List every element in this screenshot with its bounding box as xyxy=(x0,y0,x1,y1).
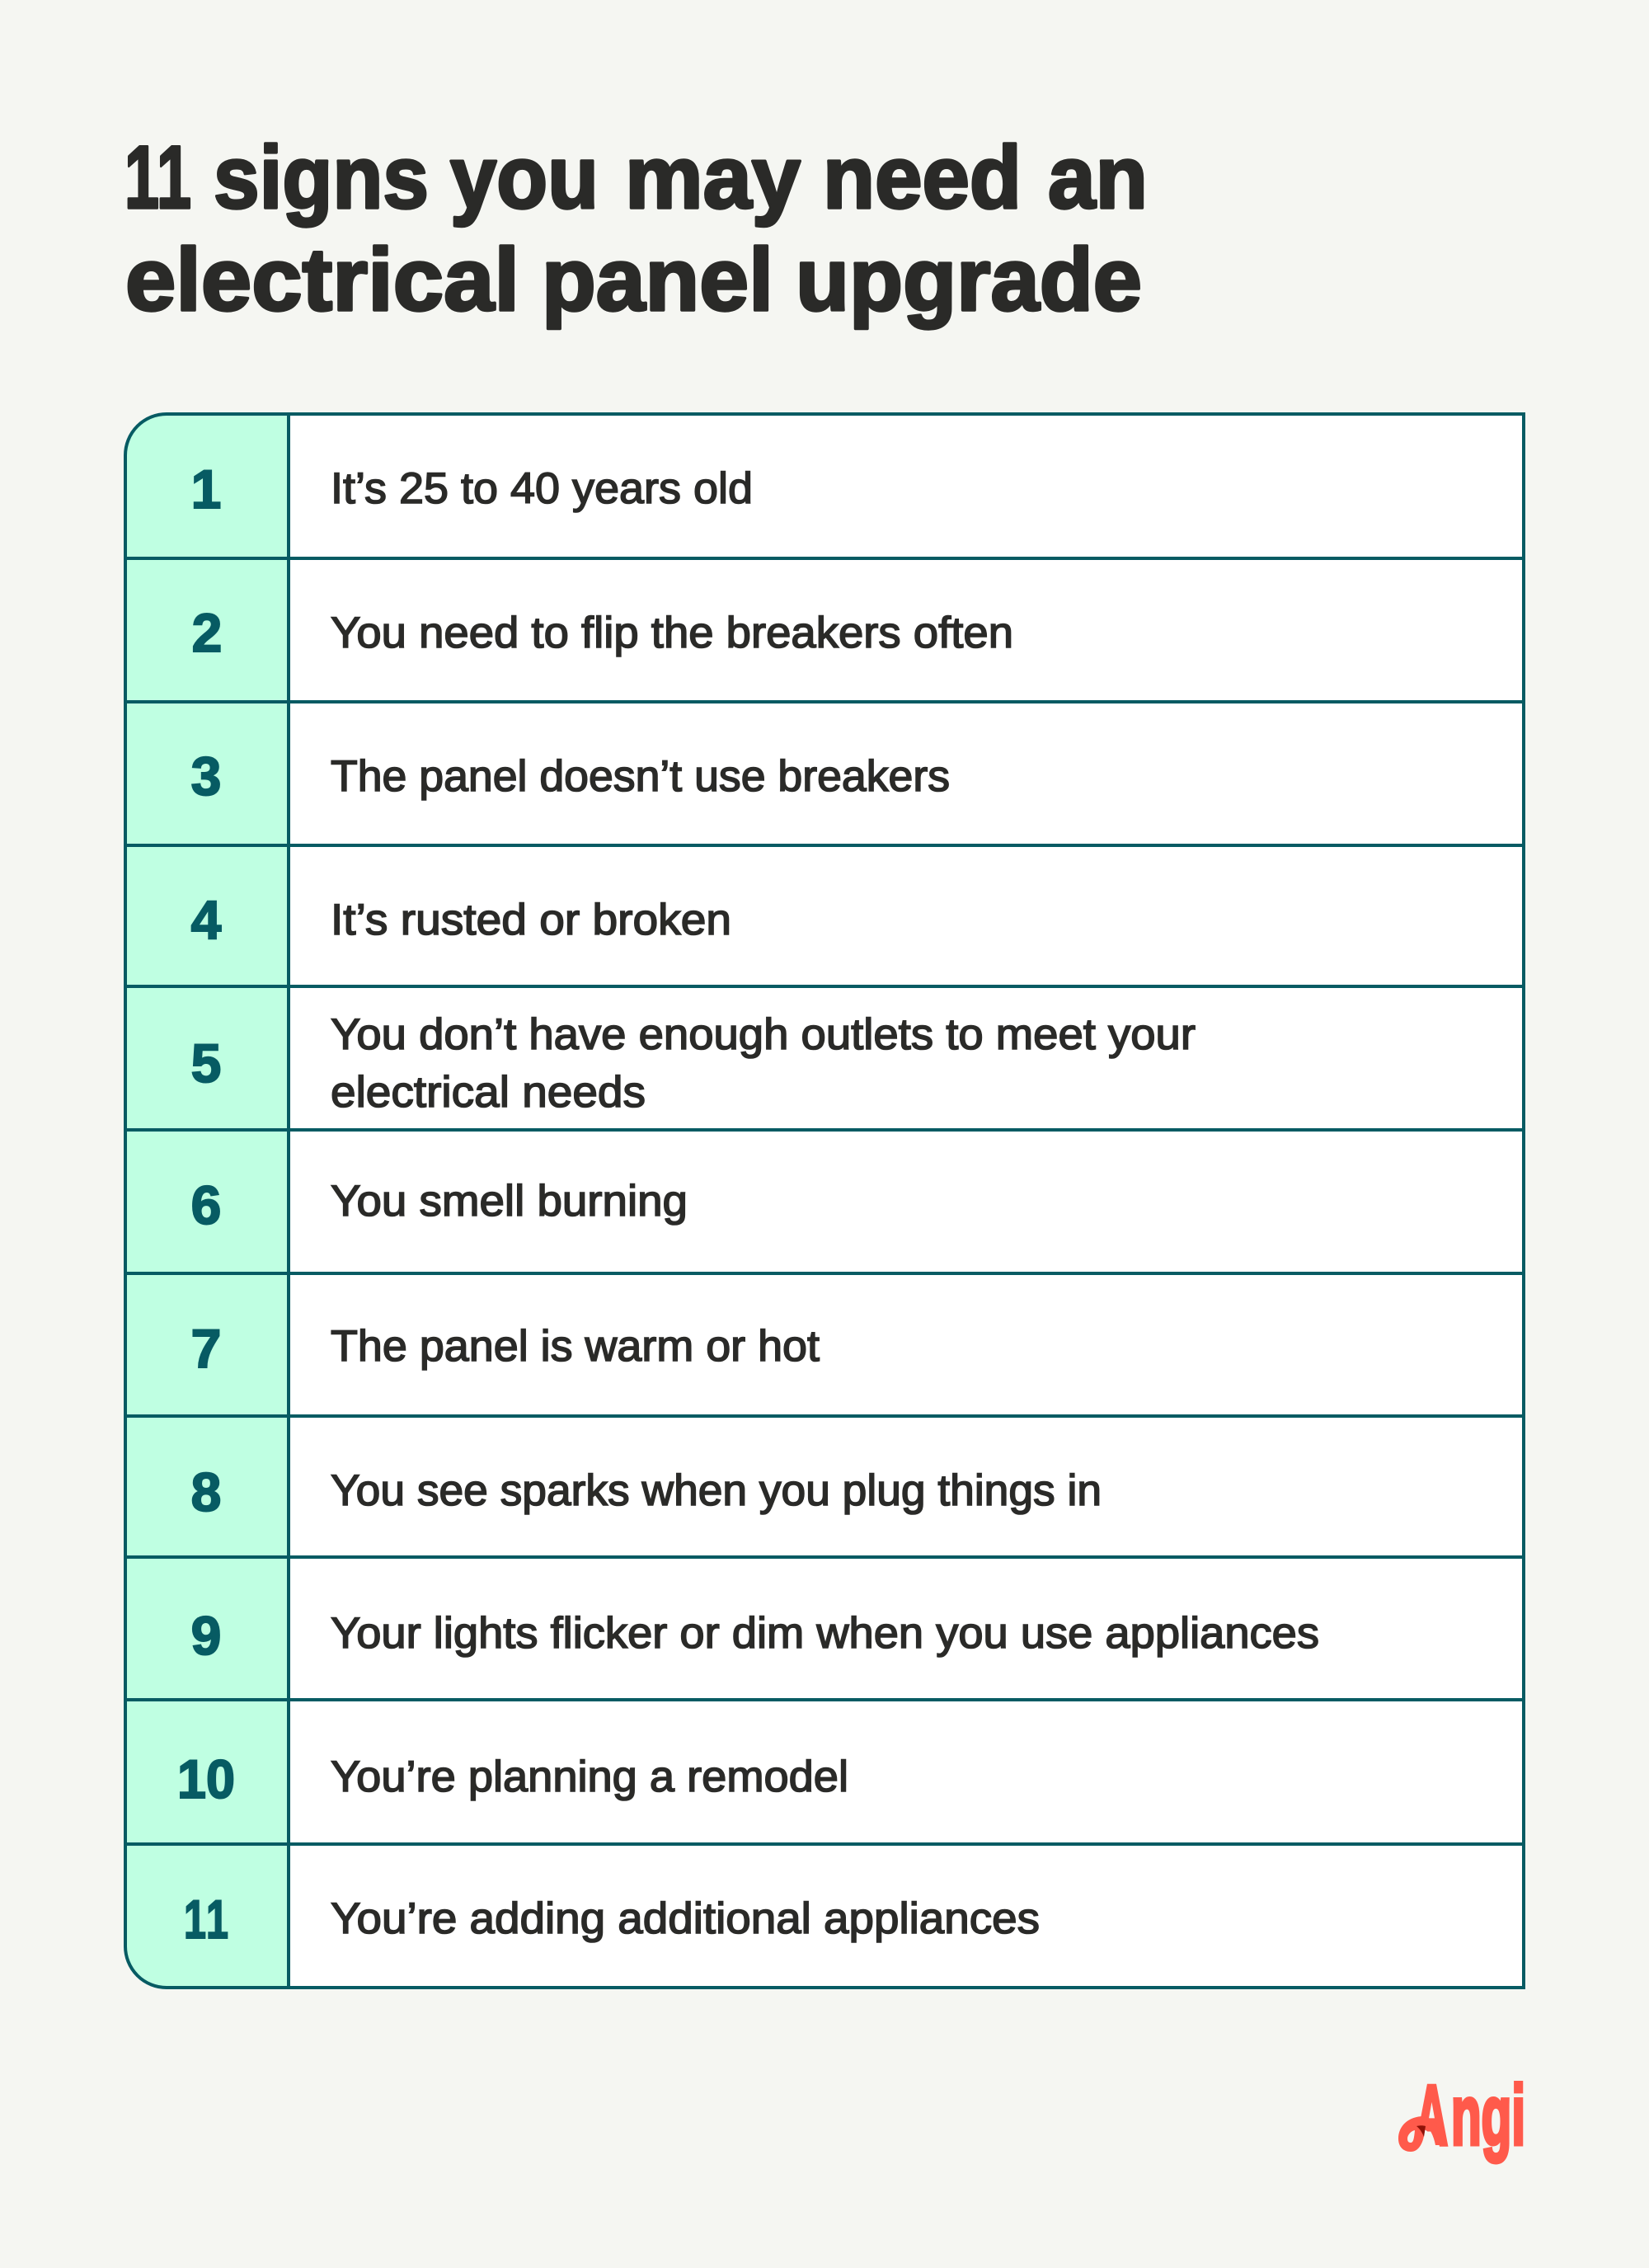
row 7: 7 xyxy=(191,1318,221,1379)
row 4: It’s rusted or broken xyxy=(331,896,731,944)
row 11: You’re adding additional appliances xyxy=(331,1894,1040,1943)
row 9: Your lights flicker or dim when you use appliances xyxy=(331,1609,1319,1658)
row 6 xyxy=(191,1174,688,1235)
number column xyxy=(125,414,289,1988)
row 5: You don’t have enough outlets to meet your xyxy=(331,1010,1196,1059)
title: may xyxy=(625,127,801,227)
row 7: The panel is warm or hot xyxy=(331,1322,820,1371)
row 7 xyxy=(191,1318,820,1379)
row 6: 6 xyxy=(191,1174,221,1235)
row 2: 2 xyxy=(192,602,222,663)
title: signs xyxy=(214,127,429,227)
title: need xyxy=(823,127,1022,227)
row 10: You’re planning a remodel xyxy=(331,1753,848,1801)
row 5: electrical needs xyxy=(331,1068,646,1117)
table background xyxy=(125,414,1524,1988)
row 3: 3 xyxy=(191,746,221,807)
row 4: 4 xyxy=(191,889,222,950)
row 8 xyxy=(191,1461,1102,1522)
title: an xyxy=(1048,127,1148,227)
title xyxy=(124,127,1148,329)
row 10: 10 xyxy=(177,1748,235,1809)
row 9: 9 xyxy=(191,1605,221,1666)
row 9 xyxy=(191,1605,1319,1666)
row 1: It’s 25 to 40 years old xyxy=(331,464,753,513)
row 6: You smell burning xyxy=(331,1177,688,1226)
row 11: 1 xyxy=(206,1889,228,1950)
table of 11 signs xyxy=(125,414,1524,1988)
row 1: 1 xyxy=(191,459,221,520)
row 11: 1 xyxy=(184,1889,206,1950)
title: you xyxy=(450,127,599,227)
row 1 xyxy=(191,459,753,520)
title: upgrade xyxy=(796,229,1142,329)
logo: Angi: ngi xyxy=(1451,2068,1525,2162)
row 2: You need to flip the breakers often xyxy=(331,609,1013,657)
title: 1 xyxy=(124,127,159,227)
row 8: You see sparks when you plug things in xyxy=(331,1466,1102,1515)
logo: Angi: A xyxy=(1416,2068,1448,2162)
row 4 xyxy=(191,889,731,950)
row 8: 8 xyxy=(191,1461,221,1522)
row 10 xyxy=(177,1748,848,1809)
row 11 xyxy=(184,1889,1040,1950)
row 2 xyxy=(192,602,1013,663)
title: 1 xyxy=(157,127,191,227)
title: electrical xyxy=(125,229,519,329)
row 3: The panel doesn’t use breakers xyxy=(331,752,950,801)
row 5 xyxy=(191,1010,1196,1117)
logo: Angi xyxy=(1398,2068,1525,2162)
title: panel xyxy=(542,229,773,329)
row 5: 5 xyxy=(191,1033,221,1094)
row 3 xyxy=(191,746,950,807)
